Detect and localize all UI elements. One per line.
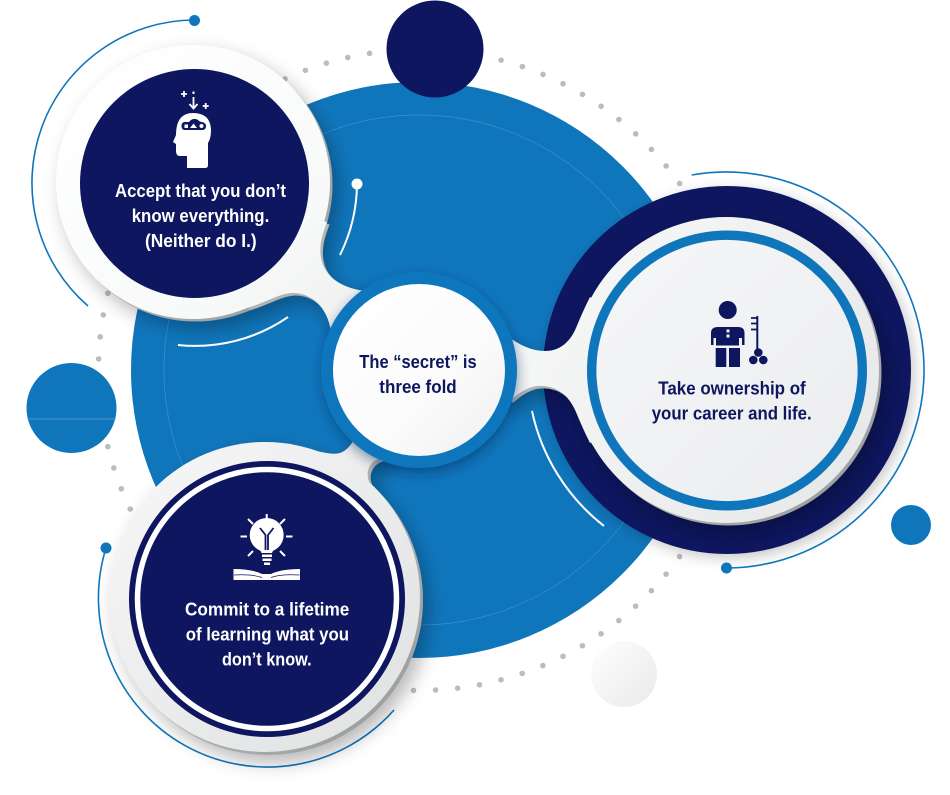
white arc with dot on blue bbox=[340, 178, 362, 255]
text: the secret is three fold bbox=[359, 352, 477, 397]
navy disc bbox=[80, 69, 309, 298]
decorative circle: left blue bbox=[26, 363, 116, 453]
text: take ownership: your career and life. bbox=[652, 404, 812, 424]
panel: accept (top-left) bbox=[32, 15, 422, 372]
navy outer ring bbox=[543, 186, 911, 554]
icon: head with idea bbox=[173, 91, 211, 168]
blue ring and inner disc bbox=[592, 235, 862, 506]
plate with neck bbox=[56, 45, 422, 372]
thin orbit arc right bbox=[692, 172, 924, 568]
text: commit: don’t know. bbox=[222, 650, 312, 670]
white arc on blue, right bbox=[532, 411, 604, 526]
white arc lower on blue bbox=[178, 317, 288, 346]
icon: light bulb over book bbox=[234, 514, 300, 580]
large blue background circle bbox=[131, 82, 707, 658]
plate with neck bbox=[110, 370, 423, 755]
text: commit bbox=[185, 600, 349, 670]
text: take ownership: Take ownership of bbox=[658, 378, 807, 398]
text: accept: know everything. bbox=[132, 206, 269, 226]
panel: take ownership (right) bbox=[419, 172, 924, 574]
decorative circle: top navy bbox=[386, 0, 484, 98]
text: accept: (Neither do I.) bbox=[145, 231, 257, 251]
plate with neck bbox=[419, 217, 882, 526]
text: the secret is three fold: three fold bbox=[379, 377, 457, 397]
text: commit: Commit to a lifetime bbox=[185, 600, 349, 620]
text: accept bbox=[115, 181, 286, 251]
text: the secret is three fold: The “secret” is bbox=[359, 352, 477, 372]
arc start dot bottom-left bbox=[100, 542, 112, 554]
text: accept: Accept that you don’t bbox=[115, 181, 286, 201]
arc start dot top-left bbox=[189, 15, 200, 26]
text: take ownership bbox=[652, 378, 812, 424]
panel: commit (bottom-left) bbox=[98, 370, 423, 767]
dotted orbit ring bbox=[98, 50, 740, 690]
white disc bbox=[333, 284, 505, 456]
icon: person with key bbox=[711, 301, 768, 367]
decorative circle: pale grey bbox=[591, 641, 657, 707]
thin orbit arc bottom-left bbox=[98, 548, 394, 767]
blue ring bbox=[321, 272, 517, 468]
text: commit: of learning what you bbox=[186, 624, 349, 644]
center circle bbox=[321, 272, 517, 468]
thin orbit arc top-left bbox=[32, 20, 194, 306]
navy disc with white ring bbox=[129, 461, 405, 737]
arc end dot right bbox=[721, 562, 732, 574]
decorative circle: right small blue bbox=[891, 505, 931, 545]
